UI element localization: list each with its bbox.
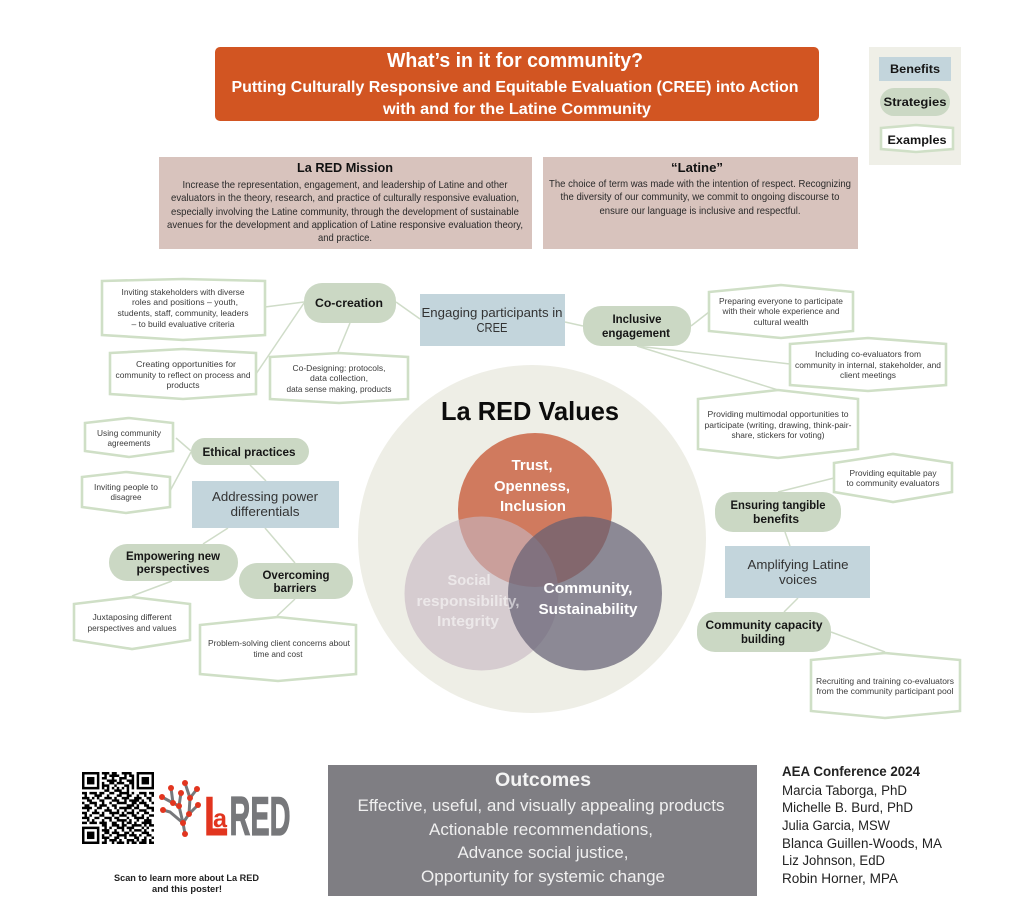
panel: La RED Mission: especially involving the Latine community, through the development of sustainable [171,207,519,218]
panel: La RED Mission: La RED Mission [297,160,393,175]
example: multimodal opportunities [698,390,858,458]
heading: La RED Values: La RED Values [441,396,619,426]
example: problem-solving: Problem-solving client concerns about [208,638,351,648]
strategy: Co-creation [304,283,396,323]
example: creating opportunities: products [166,380,200,390]
panel: Latine term: The choice of term was made with the intention of respect. Recognizing [549,179,851,190]
venn circle: Social responsibility [404,516,558,670]
example: juxtaposing perspectives: perspectives and values [88,623,176,633]
panel: Outcomes: Effective, useful, and visually appealing products [358,797,724,815]
example: co-designing [270,353,408,403]
example: inviting stakeholders: students, staff, community, leaders [118,308,248,318]
venn label: Social responsibility, Integrity: Integrity [437,613,500,630]
logo tree icon [159,780,201,837]
example: juxtaposing perspectives: Juxtaposing different [92,612,172,622]
example: multimodal opportunities: participate (writing, drawing, think-pair- [704,420,852,430]
example: equitable pay: to community evaluators [846,478,940,488]
example: including co-evaluators: client meetings [840,370,896,380]
example: including co-evaluators [790,338,946,391]
example: creating opportunities [110,349,256,399]
legend panel [869,47,961,165]
benefit: Addressing power differentials: Addressing power [212,489,319,504]
credits: authors: Robin Horner, MPA [782,871,898,886]
logo: La RED [159,780,290,847]
panel: La RED Mission: evaluators in the theory, research, and practice of culturally responsive evaluation, [171,193,519,204]
example: problem-solving: time and cost [254,649,303,659]
panel: Outcomes: Outcomes [495,770,591,791]
example: community agreements: Using community [97,428,162,438]
example: inviting stakeholders: roles and positions – youth, [132,297,238,307]
panel: La RED Mission: and practice. [318,233,372,244]
venn circle: Community, Sustainability: Community, [544,580,632,597]
strategy: Overcoming barriers [239,563,353,599]
panel: Latine term: “Latine” [671,160,723,175]
panel: Outcomes: Advance social justice, [458,844,628,862]
benefit: Engaging participants in CREE: Engaging participants in [422,305,562,320]
example: equitable pay [834,454,952,502]
credits: authors [782,764,942,886]
panel: Outcomes: Opportunity for systemic change [421,868,665,886]
venn circle: Trust, Openness, Inclusion: Trust, [512,457,552,474]
strategy: Empowering new perspectives: Empowering new [126,551,220,563]
strategy: Empowering new perspectives [109,544,238,581]
credits: authors: Liz Johnson, EdD [782,853,885,868]
strategy: Inclusive engagement [583,306,691,346]
credits: authors: Marcia Taborga, PhD [782,783,907,798]
legend: strategies: Strategies [884,97,946,109]
example: multimodal opportunities: Providing multimodal opportunities to [708,409,849,419]
logo: La RED: a [213,803,228,833]
strategy: Co-creation: Co-creation [315,298,383,310]
strategy: Ethical practices [191,438,309,465]
venn label: Social responsibility, Integrity: Social [448,572,490,589]
benefit: Amplifying Latine voices [725,546,870,598]
example: creating opportunities: community to reflect on process and [116,370,251,380]
venn label: Social responsibility, Integrity: responsibility, [416,593,520,610]
legend: examples: Examples [888,135,946,147]
example: including co-evaluators: Including co-evaluators from [815,349,921,359]
strategy: Inclusive engagement: engagement [602,328,670,340]
title banner [215,47,819,121]
example: preparing everyone: Preparing everyone to participate [719,296,843,306]
strategy: Community capacity building: Community capacity [706,620,823,632]
QR caption [114,873,260,894]
example: creating opportunities: Creating opportunities for [136,359,236,369]
example: community agreements [85,418,173,457]
title banner: What’s in it for community? [387,50,643,72]
panel: Latine term: ensure our language is inclusive and respectful. [600,206,800,217]
venn circle: Community, Sustainability: Sustainability [538,601,638,618]
benefit: Engaging participants in CREE: CREE [476,320,508,335]
panel: La RED Mission: avenues for the development and application of Latine responsive evaluation theory, [167,220,523,231]
example: recruiting co-evaluators [811,653,960,718]
strategy: Community capacity building: building [741,634,785,646]
strategy: Ensuring tangible benefits [715,492,841,532]
strategy: Ensuring tangible benefits: benefits [753,514,799,526]
benefit: Amplifying Latine voices: Amplifying Latine [748,557,848,572]
example: co-designing: Co-Designing: protocols, [292,363,386,373]
example: preparing everyone: cultural wealth [754,317,809,327]
panel: Latine term: the diversity of our community, we commit to ongoing discourse to [560,192,840,203]
venn label: Social responsibility, Integrity [416,572,520,630]
venn circle: Trust, Openness, Inclusion: Openness, [494,478,570,495]
panel: Outcomes [328,765,757,896]
panel: Outcomes: Actionable recommendations, [429,821,653,839]
connector lines [132,302,885,652]
example: inviting disagreement [82,472,170,513]
values background circle [358,365,706,713]
strategy: Ensuring tangible benefits: Ensuring tangible [730,500,826,512]
example: problem-solving [200,617,356,681]
credits: authors: AEA Conference 2024 [782,764,920,779]
example: juxtaposing perspectives [74,597,190,649]
icon: QR code [82,773,154,843]
strategy: Empowering new perspectives: perspectives [136,564,210,576]
QR caption: Scan to learn more about La RED [114,873,260,883]
benefit: Engaging participants in CREE [420,294,565,346]
example: community agreements: agreements [108,438,150,448]
legend: benefits: Benefits [890,64,940,76]
strategy: Ethical practices: Ethical practices [202,447,296,459]
example: inviting stakeholders: – to build evaluative criteria [132,319,235,329]
credits: authors: Michelle B. Burd, PhD [782,800,913,815]
panel: La RED Mission: Increase the representation, engagement, and leadership of Latine and other [182,180,508,191]
title banner: with and for the Latine Community [382,101,651,118]
example: inviting stakeholders [102,279,265,340]
example: recruiting co-evaluators: from the community participant pool [816,686,954,696]
credits: authors: Julia Garcia, MSW [782,818,890,833]
example: co-designing: data sense making, products [286,384,392,394]
benefit: Addressing power differentials [192,481,339,528]
example: recruiting co-evaluators: Recruiting and training co-evaluators [816,676,954,686]
strategy: Overcoming barriers: Overcoming [262,570,330,582]
title banner: Putting Culturally Responsive and Equitable Evaluation (CREE) into Action [232,79,798,96]
strategy: Community capacity building [697,612,831,652]
panel: La RED Mission [159,157,532,249]
example: multimodal opportunities: share, stickers for voting) [732,430,825,440]
logo: La RED: L [204,785,228,847]
strategy: Overcoming barriers: barriers [274,583,316,595]
benefit: Addressing power differentials: differentials [230,504,300,519]
venn circle: Trust, Openness, Inclusion: Inclusion [500,498,566,515]
example: equitable pay: Providing equitable pay [850,468,937,478]
QR caption: and this poster! [152,884,222,894]
venn circle: Community, Sustainability [508,516,662,670]
credits: authors: Blanca Guillen-Woods, MA [782,836,942,851]
example: inviting stakeholders: Inviting stakeholders with diverse [122,287,245,297]
example: preparing everyone: with their whole experience and [722,306,840,316]
panel: Latine term [543,157,858,249]
strategy: Inclusive engagement: Inclusive [612,314,662,326]
example: co-designing: data collection, [310,373,368,383]
example: inviting disagreement: disagree [110,492,142,502]
venn circle: Trust, Openness, Inclusion [458,433,612,587]
example: inviting disagreement: Inviting people to [94,482,158,492]
example: preparing everyone [709,285,853,338]
benefit: Amplifying Latine voices: voices [779,572,818,587]
logo: La RED: RED [230,785,290,847]
example: including co-evaluators: community in internal, stakeholder, and [795,360,941,370]
